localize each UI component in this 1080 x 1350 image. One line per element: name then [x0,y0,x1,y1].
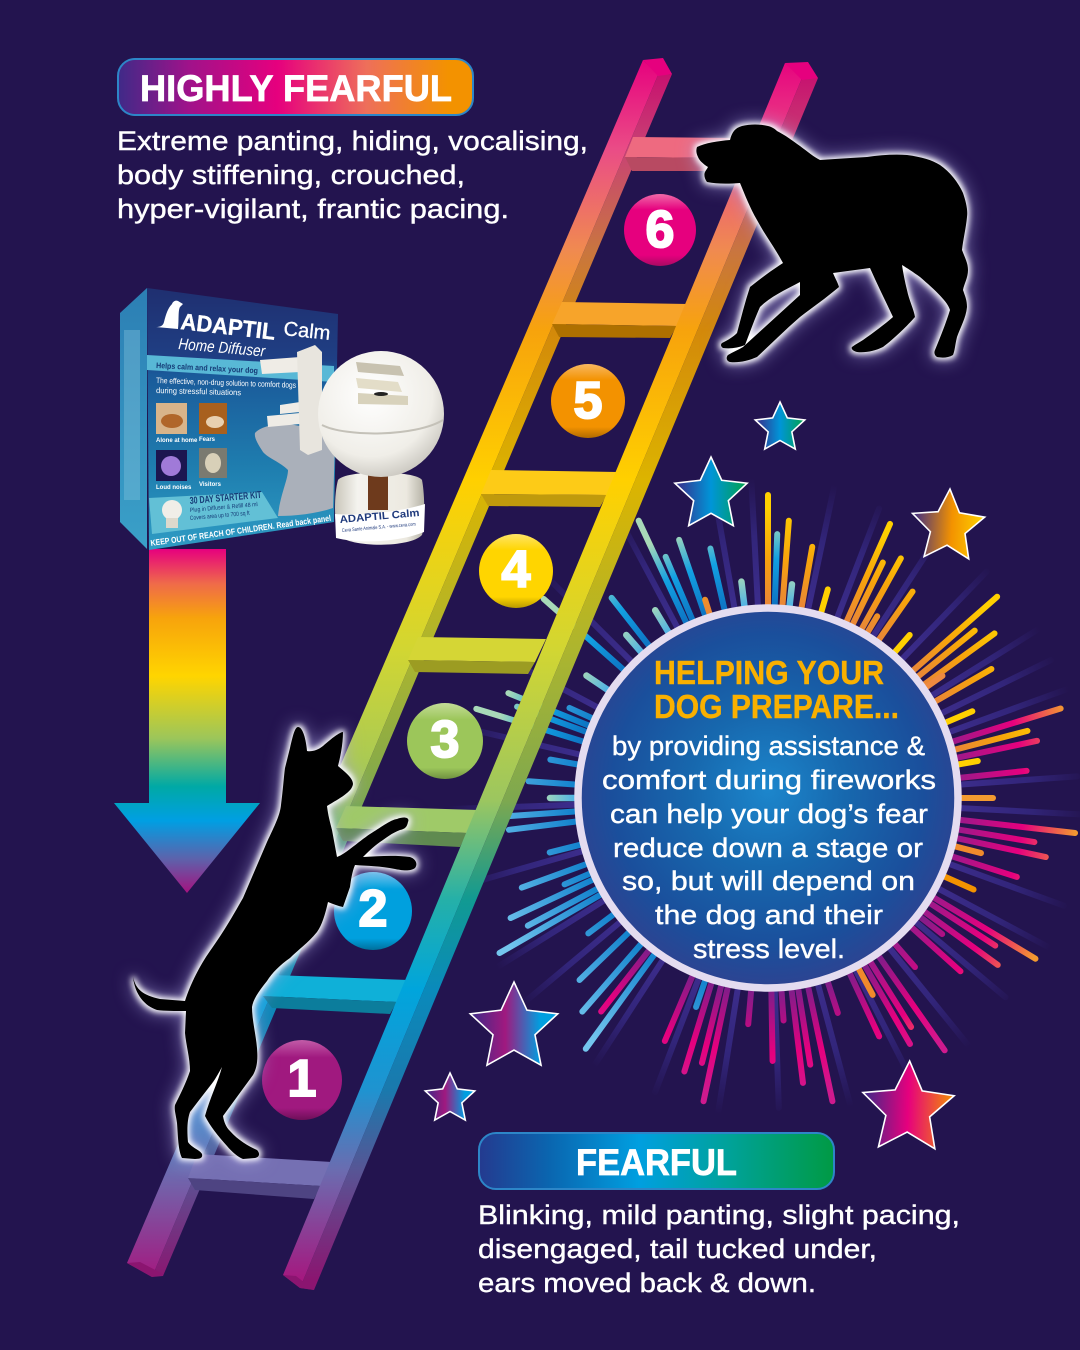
step ball 5 [551,364,625,438]
badge: fearful [479,1133,834,1189]
orange and yellow rays [705,495,1027,995]
box starter text: Covers area up to 700 sq ft [190,511,250,522]
box front panel [147,288,338,550]
rung 2 [336,806,478,847]
pale short rays [550,582,792,798]
text: fearful description [478,1200,960,1298]
panel heading: DOG PREPARE... [654,688,899,725]
box warning: KEEP OUT OF REACH OF CHILDREN. Read back panel [150,513,332,548]
panel body text: stress level. [693,934,845,964]
box description: during stressful situations [156,386,241,397]
box photo captions: Loud noises [156,485,192,491]
step ball 6 [624,194,696,266]
text: highly fearful description: Extreme panting, hiding, vocalising, [117,126,588,156]
box description [156,376,296,397]
diffuser bottle: Ceva Sante Animale S.A. - www.ceva.com [342,522,416,534]
diffuser sphere [318,351,444,477]
text: fearful description: ears moved back & down. [478,1268,816,1298]
panel body text: can help your dog’s fear [610,799,928,829]
step ball 6: 6 [646,201,674,259]
step ball 3 [407,703,483,779]
panel body text: the dog and their [655,900,883,930]
star 3 [910,487,986,560]
text: highly fearful description [117,126,588,224]
star 5 [425,1073,475,1120]
rung 0 [188,1154,332,1199]
rung 5 [552,302,688,338]
box starter text [189,490,262,522]
box dog image [255,424,335,516]
panel heading [654,654,899,725]
rung 4 [481,470,618,507]
blue and teal rays [476,521,777,742]
diffuser plug fin [297,345,322,455]
step ball 4: 4 [502,541,531,599]
pink to orange rays [869,709,1075,1027]
diffuser seam [322,420,443,433]
box tagline: Helps calm and relax your dog [156,361,258,375]
panel heading: HELPING YOUR [654,654,884,691]
box photo captions: Fears [199,437,216,443]
box side panel [120,288,147,549]
firework panel circle [578,608,958,988]
step ball 1 [262,1040,342,1120]
box photo captions: Alone at home [156,438,198,444]
box brand suffix: Calm [282,318,332,345]
box description: The effective, non-drug solution to comfort dogs [156,376,296,390]
diffuser vents [356,362,408,405]
box banner [147,355,334,382]
box brand icon [156,301,183,329]
text: fearful description: Blinking, mild panting, slight pacing, [478,1200,960,1230]
box starter text: 30 DAY STARTER KIT [189,490,262,507]
sky blue rays [500,708,706,1049]
text: highly fearful description: body stiffening, crouched, [117,160,465,190]
star 4 [470,982,558,1065]
box starter kit icon [162,500,182,528]
panel body text: reduce down a stage or [613,833,923,863]
step ball 4 [479,534,553,608]
dim purple rays [448,478,1080,1114]
text: highly fearful description: hyper-vigilant, frantic pacing. [117,194,509,224]
panel body text [602,731,936,964]
step ball 2 [334,872,412,950]
box brand name: ADAPTIL [179,308,277,345]
box photo captions [156,437,222,491]
panel body text: so, but will depend on [622,866,915,896]
step ball 5: 5 [574,372,602,430]
product: diffuser and bottle [260,345,444,545]
diffuser plug prongs [260,357,300,427]
rung 1 [263,975,408,1014]
text: fearful description: disengaged, tail tucked under, [478,1234,877,1264]
product: Adaptil Calm box [120,288,338,550]
star 6 [861,1059,955,1149]
badge: fearful: FEARFUL [576,1142,737,1183]
ladder [127,58,818,1290]
box starter banner [149,492,278,534]
badge: highly fearful: HIGHLY FEARFUL [140,68,452,109]
firework burst [448,478,1080,1114]
diffuser bottle: ADAPTIL Calm [339,507,420,526]
step ball 3: 3 [431,711,459,769]
badge: highly fearful [118,59,473,115]
box starter text: Plug in Diffuser & Refill 48 ml [190,502,258,514]
box subtitle: Home Diffuser [178,336,266,361]
panel body text: comfort during fireworks [602,765,936,795]
box photos [156,403,227,481]
rung 6 [625,137,735,171]
box photo captions: Visitors [199,482,222,488]
right rail [283,62,818,1290]
step ball 2: 2 [359,880,387,938]
step ball 1: 1 [288,1050,316,1108]
star 1 [755,402,805,449]
panel body text: by providing assistance & [612,731,925,761]
left rail [127,58,672,1277]
rung 3 [408,637,546,674]
star 2 [675,457,747,526]
icon: highly fearful dog silhouette [696,124,968,362]
arrow: stress reduces downward [114,549,260,893]
icon: fearful dog silhouette [133,727,416,1159]
diffuser bottle [335,472,425,545]
magenta rays [601,915,945,1101]
